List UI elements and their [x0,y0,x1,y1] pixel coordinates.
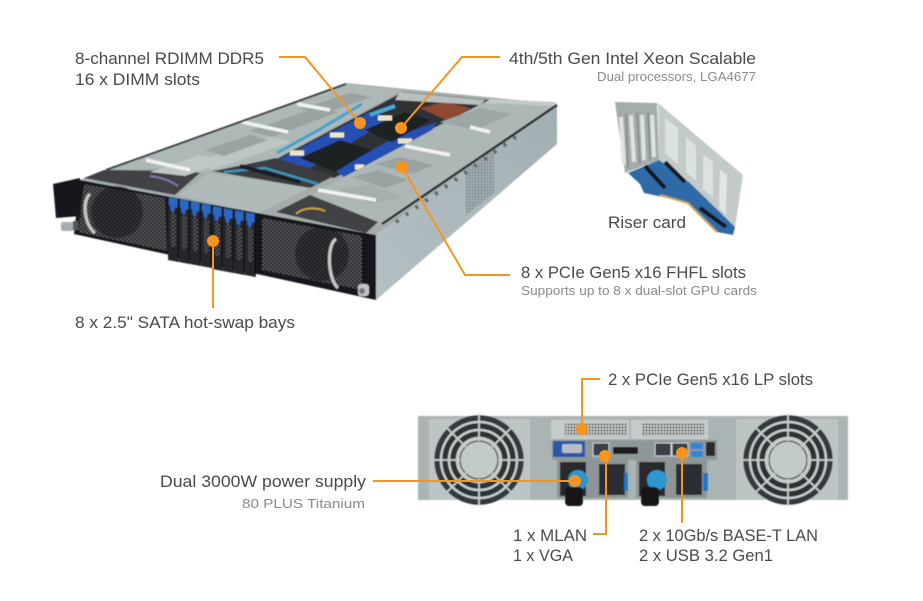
callout: PCIe FHFL [396,161,510,275]
callout: power supply [373,475,581,487]
riser card photo [615,102,743,235]
riser side plate [658,103,743,227]
centre drive cage cover [178,173,310,214]
label: MLAN VGA: 1 x MLAN [513,527,587,545]
left thumb screw [61,221,78,231]
I/O strip [552,440,717,460]
drive bays [167,197,256,277]
label: MLAN VGA: 1 x VGA [513,547,573,565]
right rear fan [742,414,834,506]
label: memory [75,50,264,89]
label: LAN USB [639,527,818,565]
motherboard with processors and DIMMs [273,92,489,178]
right GPU cover [310,99,557,224]
label: memory: 8-channel RDIMM DDR5 [75,50,264,68]
callout: SATA bays [207,235,219,308]
label: PCIe FHFL slots: Supports up to 8 x dual-slot GPU cards [521,284,757,298]
callout lines and dots [207,57,688,534]
label: LP slots: 2 x PCIe Gen5 x16 LP slots [608,371,813,389]
left fan plate [429,419,530,500]
left rear fan well [84,170,202,195]
label: PCIe FHFL slots [521,264,757,298]
riser PCB [628,160,735,235]
low-profile slots [551,420,708,439]
label: MLAN VGA [513,527,587,565]
callout: LAN USB [676,447,688,523]
rear chassis [418,416,848,500]
label: LAN USB: 2 x USB 3.2 Gen1 [639,547,773,565]
callout: MLAN VGA [593,450,611,534]
centre cable bay [212,158,334,188]
label: processors: 4th/5th Gen Intel Xeon Scalable [509,50,756,68]
label: power supply: 80 PLUS Titanium [242,497,365,511]
side vent [466,148,494,215]
callout: CPU [395,57,500,134]
label: power supply: Dual 3000W power supply [160,473,367,491]
right fan well [276,195,378,233]
right thumb screw [358,284,369,296]
callout: LP slots [576,379,600,435]
front panel [74,180,376,300]
power supply 1 [557,460,628,506]
label: memory: 16 x DIMM slots [75,71,200,89]
server rear view photo [418,414,848,506]
right fan mesh [262,218,362,290]
riser bracket [615,102,659,173]
left fan mesh [78,184,167,251]
label: processors [509,50,756,84]
label: power supply [160,473,367,511]
left GPU cover [106,84,403,176]
chassis top [80,83,557,235]
label: processors: Dual processors, LGA4677 [597,70,756,84]
label: SATA bays: 8 x 2.5" SATA hot-swap bays [75,314,295,332]
left rear fan [433,414,525,506]
label: LAN USB: 2 x 10Gb/s BASE-T LAN [639,527,818,545]
left rack ear [53,178,81,218]
right fan plate [736,419,838,500]
chassis side panel [376,104,557,300]
power supply 2 [636,460,708,506]
label: riser card: Riser card [608,214,686,232]
callout: DIMM [279,57,366,129]
label: PCIe FHFL slots: 8 x PCIe Gen5 x16 FHFL slots [521,264,746,282]
server front view photo [53,83,557,300]
